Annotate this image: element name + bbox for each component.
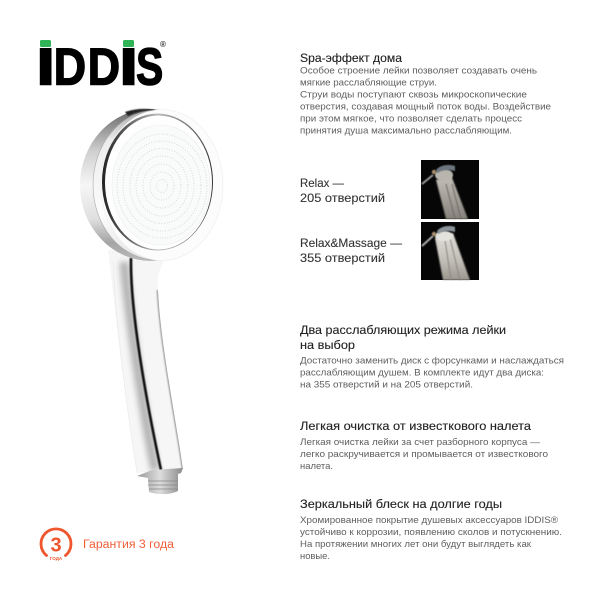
label: Relax <box>300 176 385 205</box>
threaded connector <box>137 468 183 494</box>
label: Relax: 205 отверстий <box>300 191 385 205</box>
text block: two modes: на выбор <box>300 338 355 352</box>
text block: Spa-effect: принятия душа максимально расслабляющим. <box>300 124 512 136</box>
logo: IDDIS <box>36 37 166 96</box>
logo: IDDIS: I <box>36 37 55 96</box>
icon: 3-year warranty badge: ГОДА <box>50 556 63 561</box>
label: Relax&Massage: 355 отверстий <box>300 251 385 265</box>
text block: two modes <box>300 323 564 390</box>
illustration: chrome hand shower <box>80 109 223 494</box>
text block: Spa-effect: при этом мягкое, что позволяет сделать процесс <box>300 112 522 124</box>
icon: 3-year warranty badge <box>41 529 71 561</box>
text block: easy cleaning <box>300 419 548 471</box>
text block: mirror shine: Зеркальный блеск на долгие годы <box>300 497 502 511</box>
white spray disc <box>105 116 212 250</box>
text block: two modes: Два расслабляющих режима лейки <box>300 323 506 337</box>
label: Relax&Massage <box>300 236 402 265</box>
warranty text: Гарантия 3 года <box>83 539 175 551</box>
logo: IDDIS: D <box>88 38 120 96</box>
white outer ring <box>101 110 223 260</box>
text block: mirror shine: На протяжении многих лет они будут выглядеть как <box>300 538 532 549</box>
dark mirror rim <box>102 114 213 250</box>
head body <box>80 109 222 261</box>
text block: Spa-effect: Spa-эффект дома <box>300 51 402 65</box>
logo: IDDIS: S <box>136 38 163 96</box>
text block: two modes: расслабляющим душем. В комплекте идут два диска: <box>300 366 544 378</box>
text block: Spa-effect: Особое строение лейки позволяет создавать очень <box>300 64 537 76</box>
logo: IDDIS: ® <box>160 40 166 49</box>
text block: mirror shine: устойчиво к коррозии, появлению сколов и потускнению. <box>300 526 562 537</box>
label: Relax&Massage: Relax&Massage — <box>300 236 402 250</box>
photo: Relax&Massage spray <box>421 222 479 280</box>
text block: Spa-effect: отверстия, создавая мощный поток воды. Воздействие <box>300 100 551 112</box>
text block: mirror shine: новые. <box>300 550 330 561</box>
text block: two modes: на 355 отверстий и на 205 отверстий. <box>300 378 473 390</box>
logo: IDDIS: D <box>54 38 86 96</box>
text block: mirror shine <box>300 497 562 561</box>
text block: Spa-effect <box>300 51 551 136</box>
text block: Spa-effect: мягкие расслабляющие струи. <box>300 76 437 88</box>
text block: easy cleaning: легко раскручивается и промывается от известкового <box>300 448 548 459</box>
text block: Spa-effect: Струи воды поступают сквозь микроскопические <box>300 88 527 100</box>
photo: Relax spray <box>421 160 479 219</box>
nozzle rings <box>117 134 207 238</box>
text block: easy cleaning: Легкая очистка лейки за счет разборного корпуса — <box>300 436 541 447</box>
text block: mirror shine: Хромированное покрытие душевых аксессуаров IDDIS® <box>300 514 558 525</box>
logo: IDDIS: I <box>119 37 138 96</box>
text block: easy cleaning: Легкая очистка от известкового налета <box>300 419 531 433</box>
handle <box>108 250 183 472</box>
text block: two modes: Достаточно заменить диск с форсунками и наслаждаться <box>300 354 564 366</box>
label: Relax: Relax — <box>300 176 344 190</box>
icon: 3-year warranty badge: 3 <box>50 534 62 556</box>
text block: easy cleaning: налета. <box>300 460 333 471</box>
